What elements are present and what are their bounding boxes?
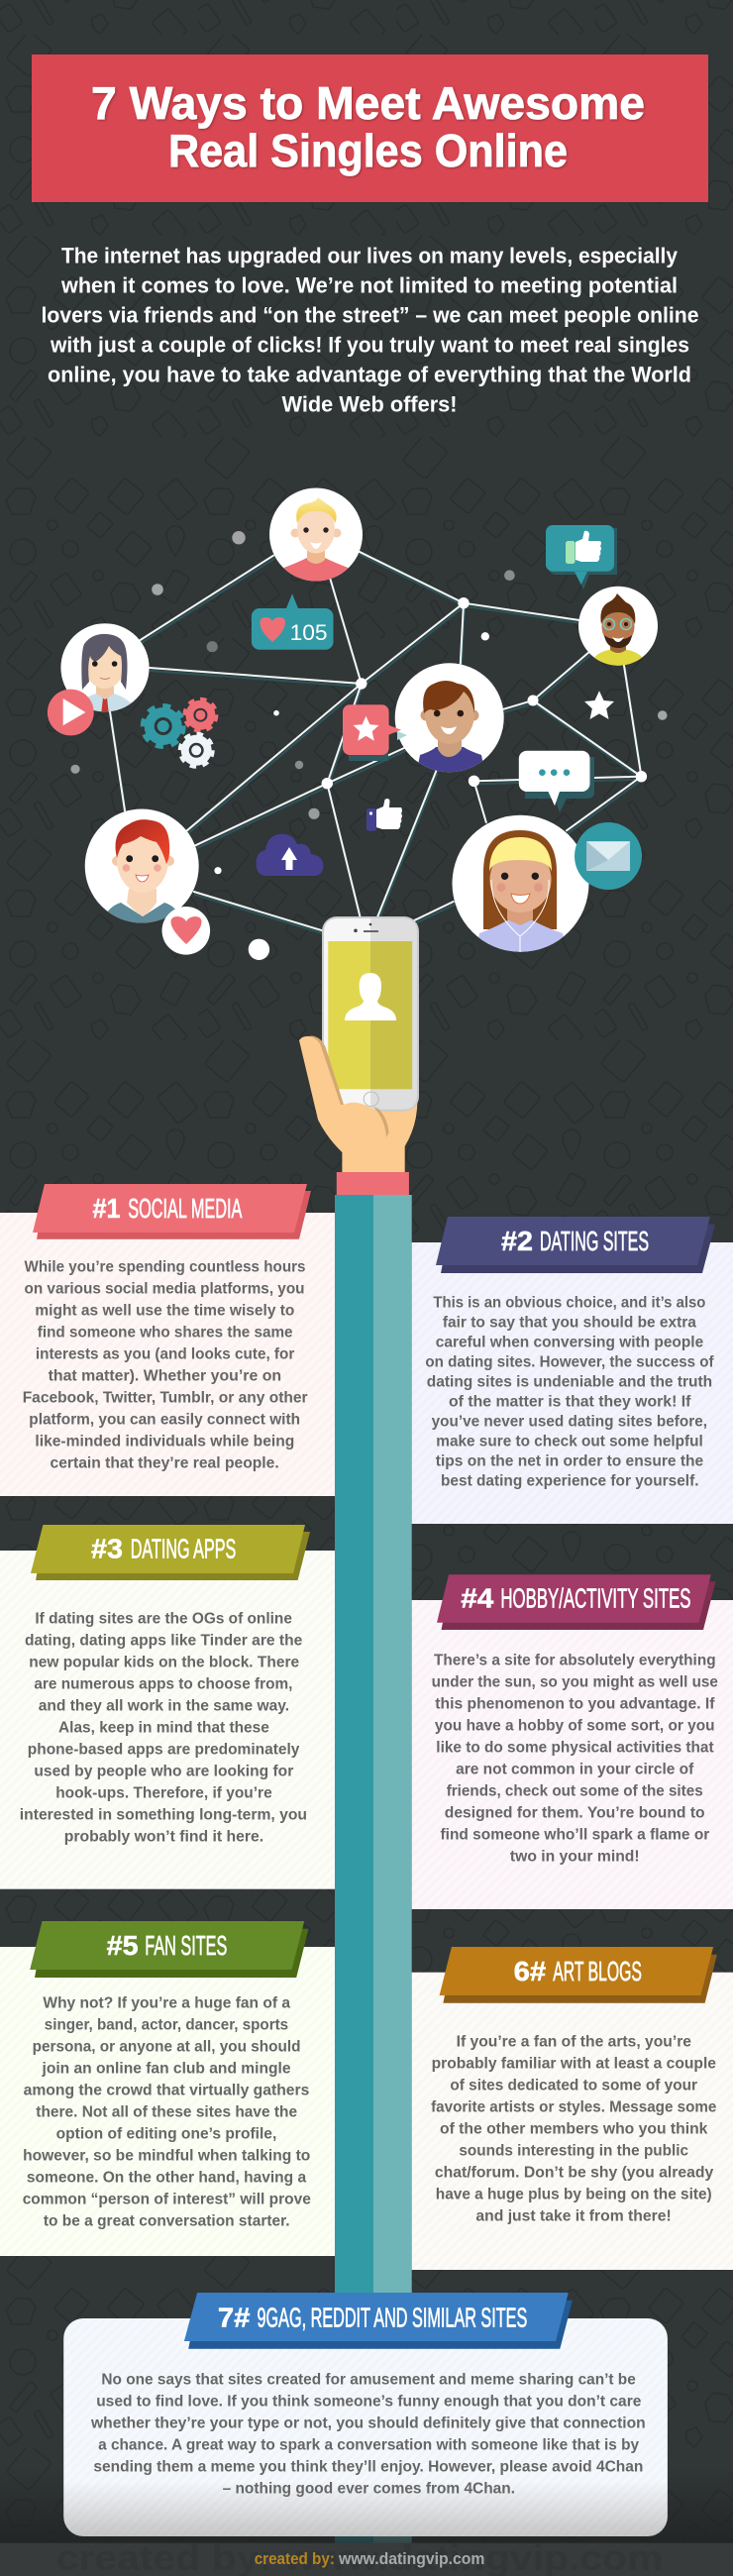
body text: on dating sites. However, the success of: [425, 1353, 714, 1370]
body text: have a huge plus by being on the site): [436, 2186, 712, 2202]
body text: to be a great conversation starter.: [44, 2213, 290, 2230]
avatar: blond man: [269, 487, 363, 587]
body text: [432, 1653, 718, 1866]
icon: thumbs up: [366, 799, 402, 831]
panel: #1 social media: [0, 1184, 335, 1496]
panel: #2 dating sites: [412, 1217, 733, 1524]
ribbon heading: #3: [91, 1534, 123, 1564]
body text: If dating sites are the OGs of online: [35, 1611, 292, 1628]
panel: #7 9gag, reddit and similar sites: [63, 2293, 668, 2536]
ribbon heading: 9GAG, REDDIT AND SIMILAR SITES: [258, 2302, 527, 2332]
body text: [431, 2033, 716, 2224]
body text: option of editing one’s profile,: [56, 2126, 276, 2143]
body text: used by people who are looking for: [34, 1764, 293, 1780]
ribbon heading: #2: [501, 1226, 533, 1256]
ribbon heading: #5: [107, 1930, 139, 1961]
hand palm and wrist: [318, 1098, 417, 1173]
body text: make sure to check out some helpful: [436, 1433, 703, 1449]
body text: [425, 1294, 714, 1489]
body text: platform, you can easily connect with: [29, 1411, 300, 1428]
panel: #5 fan sites: [0, 1921, 335, 2256]
body text: and just take it from there!: [475, 2207, 672, 2224]
body text: No one says that sites created for amusement and meme sharing can’t be: [101, 2372, 636, 2389]
ribbon heading: [33, 1184, 311, 1239]
avatar: red-haired woman: [85, 808, 199, 926]
ribbon heading: 7#: [218, 2302, 251, 2332]
body text: favorite artists or styles. Message some: [431, 2098, 716, 2115]
body text: you’ve never used dating sites before,: [432, 1413, 707, 1430]
body text: While you’re spending countless hours: [24, 1258, 306, 1275]
icon: thumbs up bubble: [546, 525, 617, 590]
body text: however, so be mindful when talking to: [23, 2148, 311, 2165]
body text: like-minded individuals while being: [35, 1433, 294, 1449]
body text: [20, 1611, 307, 1846]
body text: you have a hobby of some sort, or you: [435, 1718, 715, 1735]
body text: dating, dating apps like Tinder are the: [25, 1633, 302, 1650]
body text: designed for them. You’re bound to: [445, 1805, 705, 1822]
body text: sounds interesting in the public: [459, 2142, 688, 2159]
body text: that matter). Whether you’re on: [49, 1367, 281, 1384]
ribbon heading: ART BLOGS: [553, 1956, 642, 1986]
ribbon heading: #1: [93, 1193, 121, 1224]
body text: phone-based apps are predominately: [28, 1742, 299, 1759]
body text: there. Not all of these sites have the: [36, 2104, 297, 2121]
body text: [23, 1995, 311, 2230]
icon: white star: [584, 691, 614, 719]
body text: dating sites is undeniable and the truth: [427, 1373, 712, 1390]
panel: #4 hobby/activity sites: [412, 1574, 733, 1909]
intro text: lovers via friends and “on the street” – we can meet people online: [42, 303, 699, 328]
icon: like counter bubble: 105: [290, 620, 328, 645]
body text: – nothing good ever comes from 4Chan.: [223, 2481, 515, 2498]
avatar: dark-haired man with tie: [60, 623, 150, 715]
body text: If you’re a fan of the arts, you’re: [457, 2033, 691, 2050]
body text: Why not? If you’re a huge fan of a: [43, 1995, 290, 2012]
body text: probably won’t find it here.: [64, 1829, 263, 1846]
body text: fair to say that you should be extra: [443, 1314, 696, 1331]
body text: careful when conversing with people: [436, 1334, 703, 1350]
footer credit: www.datingvip.com: [338, 2549, 484, 2568]
body text: best dating experience for yourself.: [441, 1472, 699, 1489]
ribbon heading: [436, 1217, 715, 1273]
body text: [90, 2372, 646, 2498]
avatar: brown-haired man in centre: [395, 663, 504, 775]
avatar: woman with headband and earphones: [452, 815, 588, 955]
body text: of the matter is that they work! If: [449, 1393, 691, 1410]
ribbon heading: DATING SITES: [540, 1226, 649, 1256]
intro text: with just a couple of clicks! If you truly want to meet real singles: [50, 333, 689, 358]
body text: persona, or anyone at all, you should: [33, 2039, 300, 2056]
ribbon heading: 6#: [514, 1956, 547, 1986]
body text: join an online fan club and mingle: [42, 2061, 291, 2078]
body text: chat/forum. Don’t be shy (you already: [435, 2164, 713, 2181]
body text: are not common in your circle of: [456, 1762, 694, 1778]
intro text: when it comes to love. We’re not limited to meeting potential: [60, 273, 678, 298]
icon: star bubble: [343, 704, 407, 761]
ribbon heading: FAN SITES: [145, 1930, 227, 1961]
footer credit: created by:: [255, 2549, 335, 2568]
body text: hook-ups. Therefore, if you’re: [55, 1785, 272, 1802]
title banner: 7 Ways to Meet Awesome: [91, 77, 645, 129]
column: sleeve running down the page: [335, 1195, 412, 2543]
ribbon heading: [30, 1921, 308, 1978]
body text: and they all work in the same way.: [39, 1698, 289, 1715]
ribbon heading: DATING APPS: [131, 1534, 236, 1564]
ribbon heading: SOCIAL MEDIA: [128, 1193, 242, 1224]
icon: person silhouette on screen: [345, 973, 396, 1020]
intro text: Wide Web offers!: [281, 392, 458, 417]
body text: There’s a site for absolutely everything: [434, 1653, 716, 1669]
body text: sending them a meme you think they’ll enjoy. However, please avoid 4Chan: [93, 2459, 643, 2476]
intro text: [42, 244, 699, 417]
ribbon heading: [437, 1574, 715, 1630]
ribbon heading: [184, 2293, 573, 2349]
body text: friends, check out some of the sites: [447, 1783, 703, 1800]
ribbon heading: #4: [461, 1583, 494, 1614]
panel: #6 art blogs: [412, 1947, 733, 2270]
body text: among the crowd that virtually gathers: [24, 2083, 309, 2099]
body text: This is an obvious choice, and it’s also: [433, 1294, 706, 1311]
body text: interests as you (and looks cute, for: [36, 1345, 294, 1362]
intro text: online, you have to take advantage of everything that the World: [48, 363, 691, 387]
icon: heart circle: [162, 907, 210, 955]
hand thumb over phone: [299, 1036, 388, 1152]
body text: whether they’re your type or not, you should definitely give that connection: [90, 2415, 646, 2432]
icon: upload cloud: [257, 834, 323, 876]
sleeve cuff: [337, 1172, 409, 1195]
body text: like to do some physical activities that: [436, 1740, 714, 1757]
body text: interested in something long-term, you: [20, 1807, 307, 1824]
network nodes and floating dots: [70, 531, 667, 960]
body text: Alas, keep in mind that these: [58, 1720, 269, 1737]
body text: are numerous apps to choose from,: [34, 1676, 292, 1693]
body text: two in your mind!: [510, 1849, 640, 1866]
icon: mail circle: [575, 822, 642, 890]
body text: might as well use the time wisely to: [35, 1302, 295, 1319]
body text: a chance. A great way to spark a conversation with someone like that is by: [98, 2437, 639, 2454]
body text: someone. On the other hand, having a: [27, 2170, 306, 2187]
icon: chat bubble: [519, 751, 594, 812]
ribbon heading: [31, 1525, 310, 1580]
ribbon heading: [440, 1947, 717, 2003]
body text: find someone who shares the same: [38, 1324, 293, 1341]
avatar: man with glasses: [578, 587, 658, 666]
body text: Facebook, Twitter, Tumblr, or any other: [23, 1389, 308, 1406]
icon: like counter bubble: [252, 593, 333, 650]
bottom darkening: [0, 2467, 733, 2543]
body text: certain that they’re real people.: [50, 1454, 279, 1471]
network connection lines: [110, 552, 642, 933]
body text: tips on the net in order to ensure the: [436, 1452, 703, 1469]
title banner: Real Singles Online: [168, 125, 568, 176]
body text: this phenomenon to you advantage. If: [435, 1696, 715, 1713]
body text: of the other members who you think: [440, 2120, 707, 2137]
body text: new popular kids on the block. There: [29, 1655, 299, 1671]
body text: find someone who’ll spark a flame or: [440, 1827, 709, 1844]
body text: singer, band, actor, dancer, sports: [45, 2017, 288, 2034]
intro text: The internet has upgraded our lives on many levels, especially: [61, 244, 679, 268]
body text: of sites dedicated to some of your: [450, 2077, 697, 2093]
icon: play button: [48, 690, 94, 735]
icon: gears: [143, 699, 216, 767]
smartphone: [322, 916, 419, 1112]
body text: under the sun, so you might as well use: [432, 1674, 718, 1691]
body text: probably familiar with at least a couple: [432, 2055, 716, 2072]
title banner: [32, 54, 708, 202]
body text: on various social media platforms, you: [24, 1280, 305, 1297]
panel: #3 dating apps: [0, 1525, 335, 1889]
body text: common “person of interest” will prove: [23, 2192, 311, 2208]
body text: used to find love. If you think someone’s funny enough that you don’t care: [96, 2394, 641, 2411]
body text: [23, 1258, 308, 1471]
